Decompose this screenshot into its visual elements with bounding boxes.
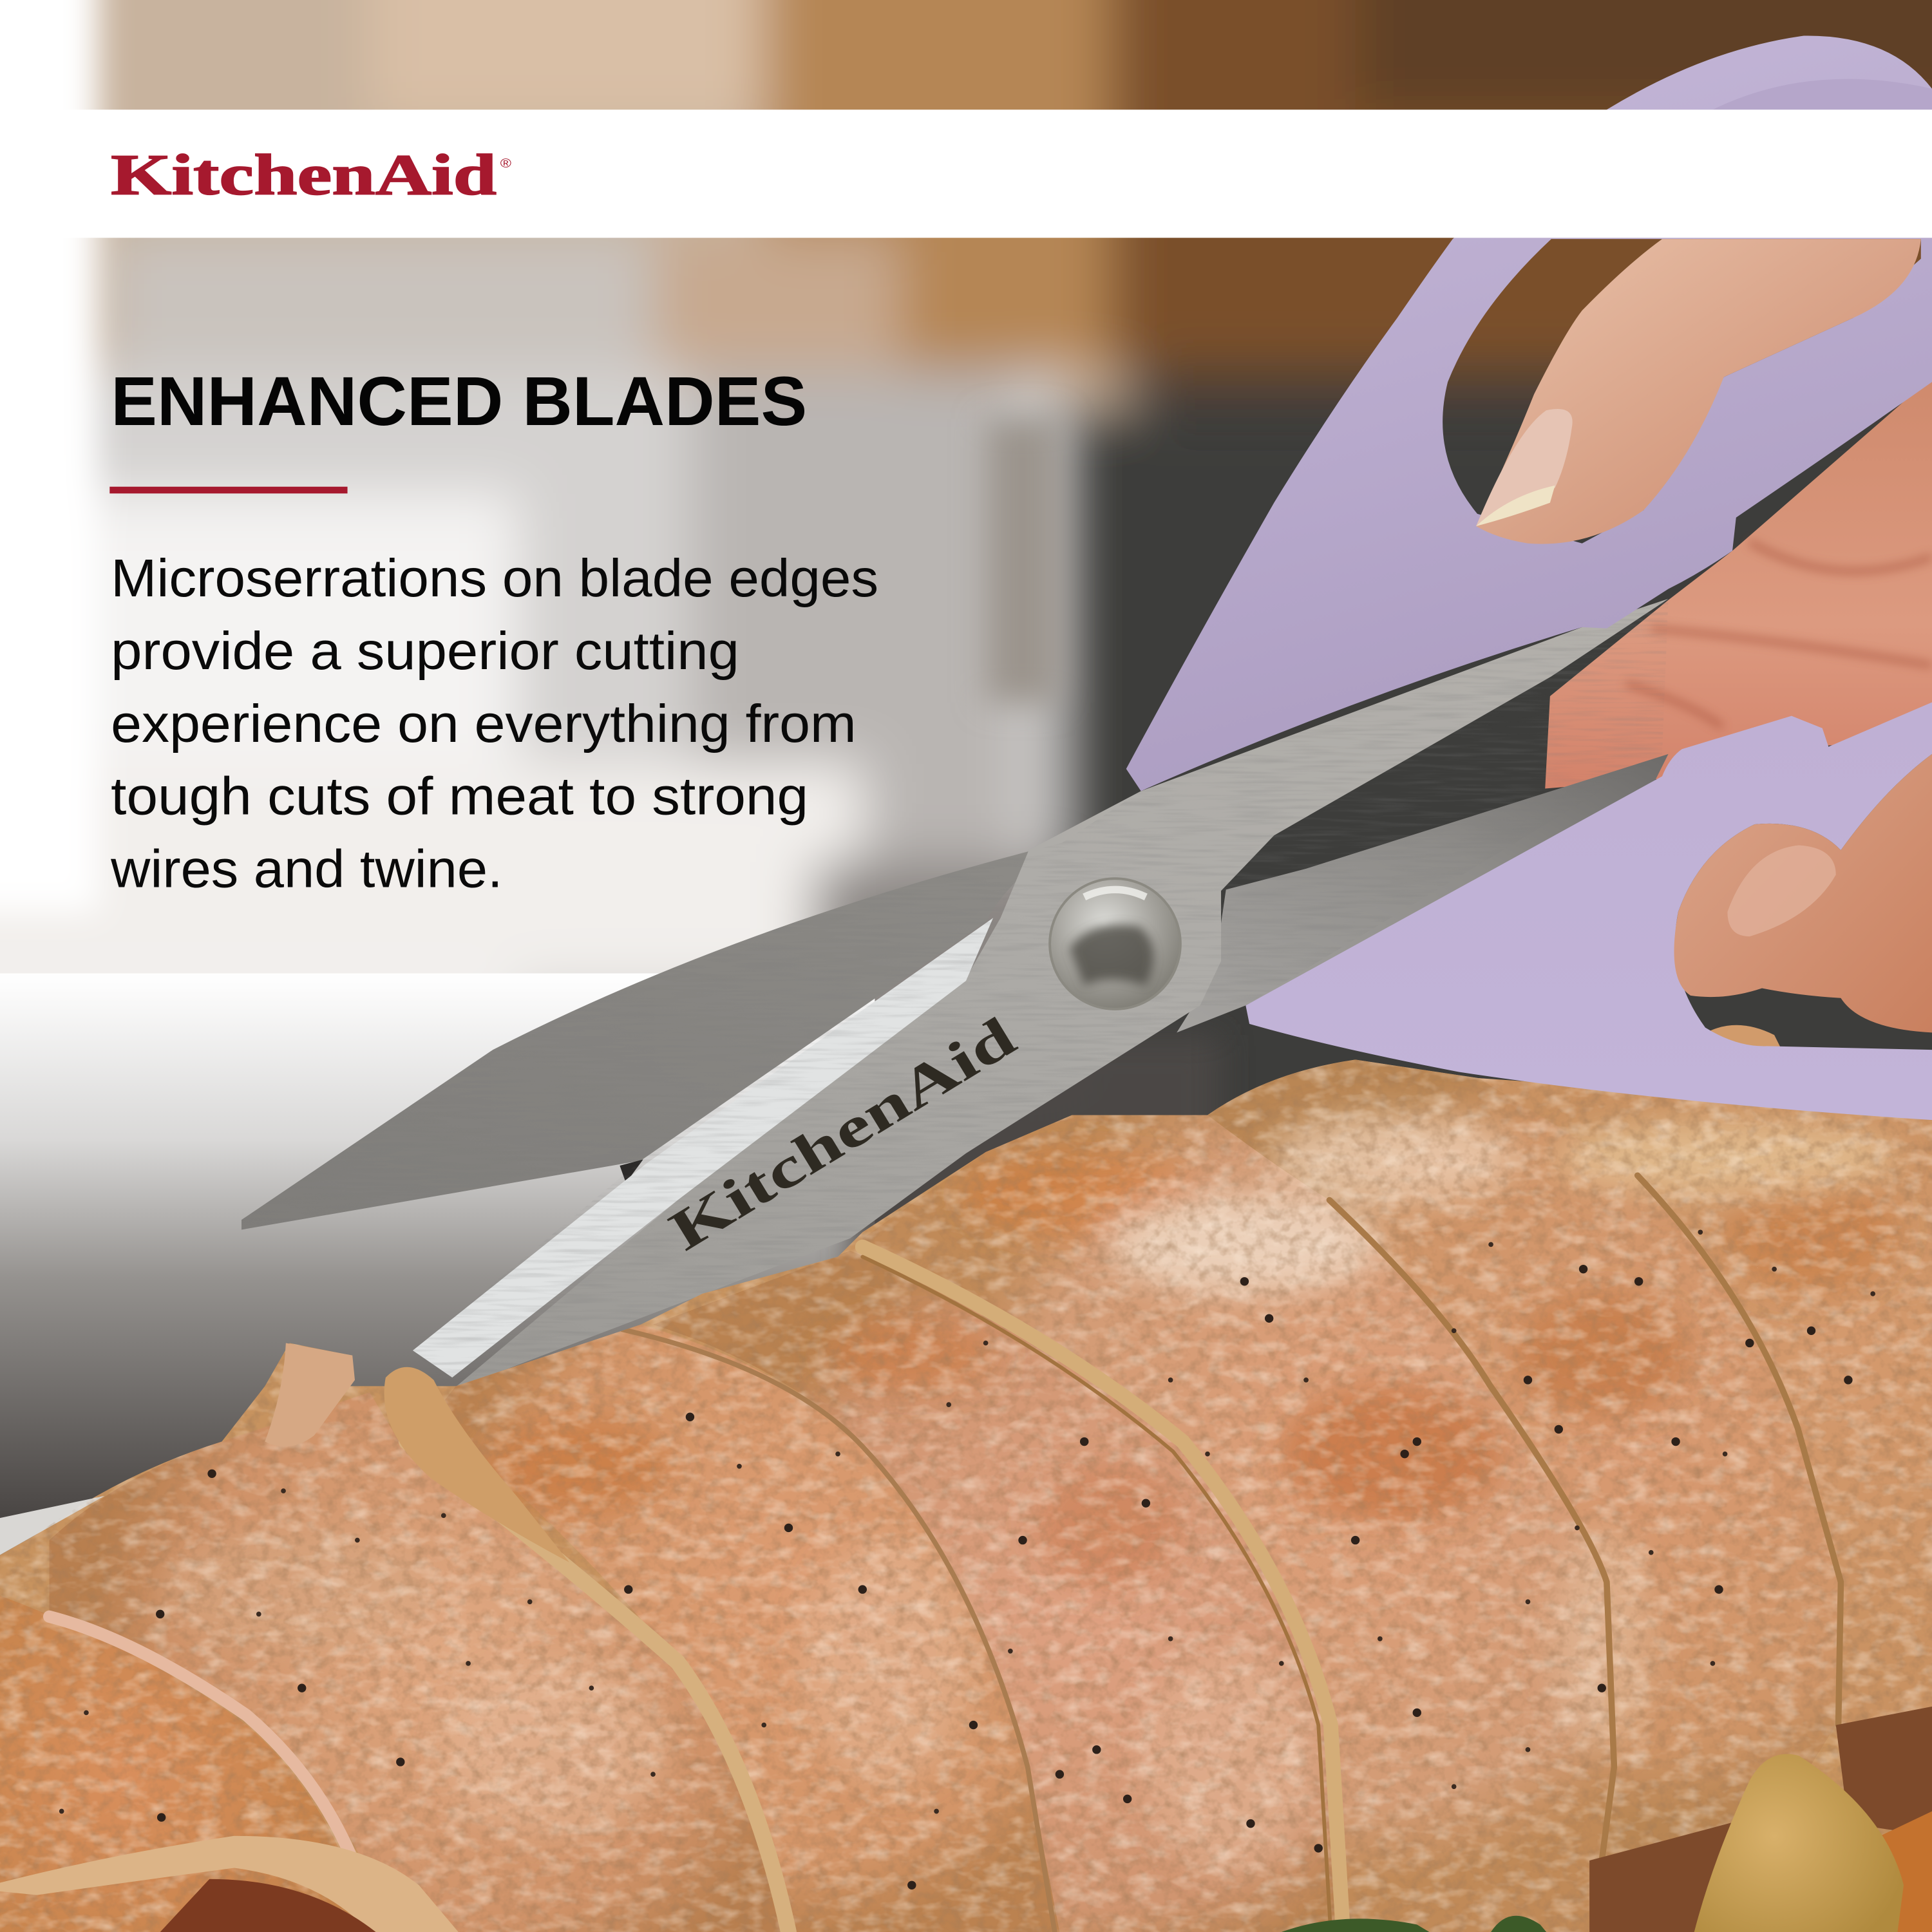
heading: ENHANCED BLADES [111, 362, 807, 440]
thumb and fingers [1674, 754, 1932, 1032]
back blade: serrated lower jaw [242, 843, 1062, 1229]
twine lines [50, 1175, 1841, 1932]
pivot rivet [1050, 878, 1180, 1009]
front blade: white bevel [413, 918, 993, 1378]
meat silhouette base [0, 1059, 1932, 1932]
lobes [0, 1596, 370, 1932]
blade tip under flap [336, 1383, 406, 1430]
blade logo: KitchenAid [659, 1005, 1027, 1263]
cut flap of meat [265, 1343, 355, 1446]
dark pan juices [1589, 1707, 1932, 1932]
hand: palm behind handles [1545, 377, 1932, 788]
roast meat [0, 1025, 1932, 1932]
speckled surface texture [0, 1047, 1932, 1932]
roasted potato [1694, 1754, 1904, 1932]
KitchenAid logo: KitchenAid [111, 143, 497, 207]
thumbnail [1727, 845, 1836, 936]
body text [110, 549, 878, 899]
upper lavender handle [1126, 35, 1932, 791]
body text: provide a superior cutting [111, 622, 739, 681]
front blade: brushed steel body [452, 599, 1669, 1390]
red divider rule [109, 487, 348, 493]
body text: experience on everything from [111, 695, 857, 753]
back blade: tang behind handle [1177, 754, 1669, 1032]
white header band [0, 109, 1932, 238]
dark roast cavity [160, 1879, 376, 1932]
body text: tough cuts of meat to strong [111, 768, 808, 826]
scissor blades [242, 599, 1668, 1386]
index finger [1476, 239, 1921, 544]
browned patches and glaze highlights [160, 1115, 1897, 1873]
body text: wires and twine. [110, 840, 503, 899]
peppercorns [160, 1269, 1848, 1885]
handle inner shadow above band [1712, 79, 1932, 109]
registered mark: ® [500, 157, 511, 171]
notch shadow [620, 1159, 643, 1183]
bottom-left meat flap [0, 1836, 459, 1932]
plate edge [0, 1496, 105, 1555]
fingernail [1476, 409, 1573, 526]
nail tip [1476, 486, 1555, 526]
green herb leaves [1282, 1916, 1546, 1932]
meat visible through lower handle [1707, 1025, 1786, 1059]
body text: Microserrations on blade edges [111, 549, 878, 608]
roasted orange vegetable [1854, 1811, 1932, 1932]
brushed texture [413, 603, 1668, 1378]
cut twine strand [384, 1367, 569, 1562]
lower lavender handle [1245, 703, 1932, 1120]
